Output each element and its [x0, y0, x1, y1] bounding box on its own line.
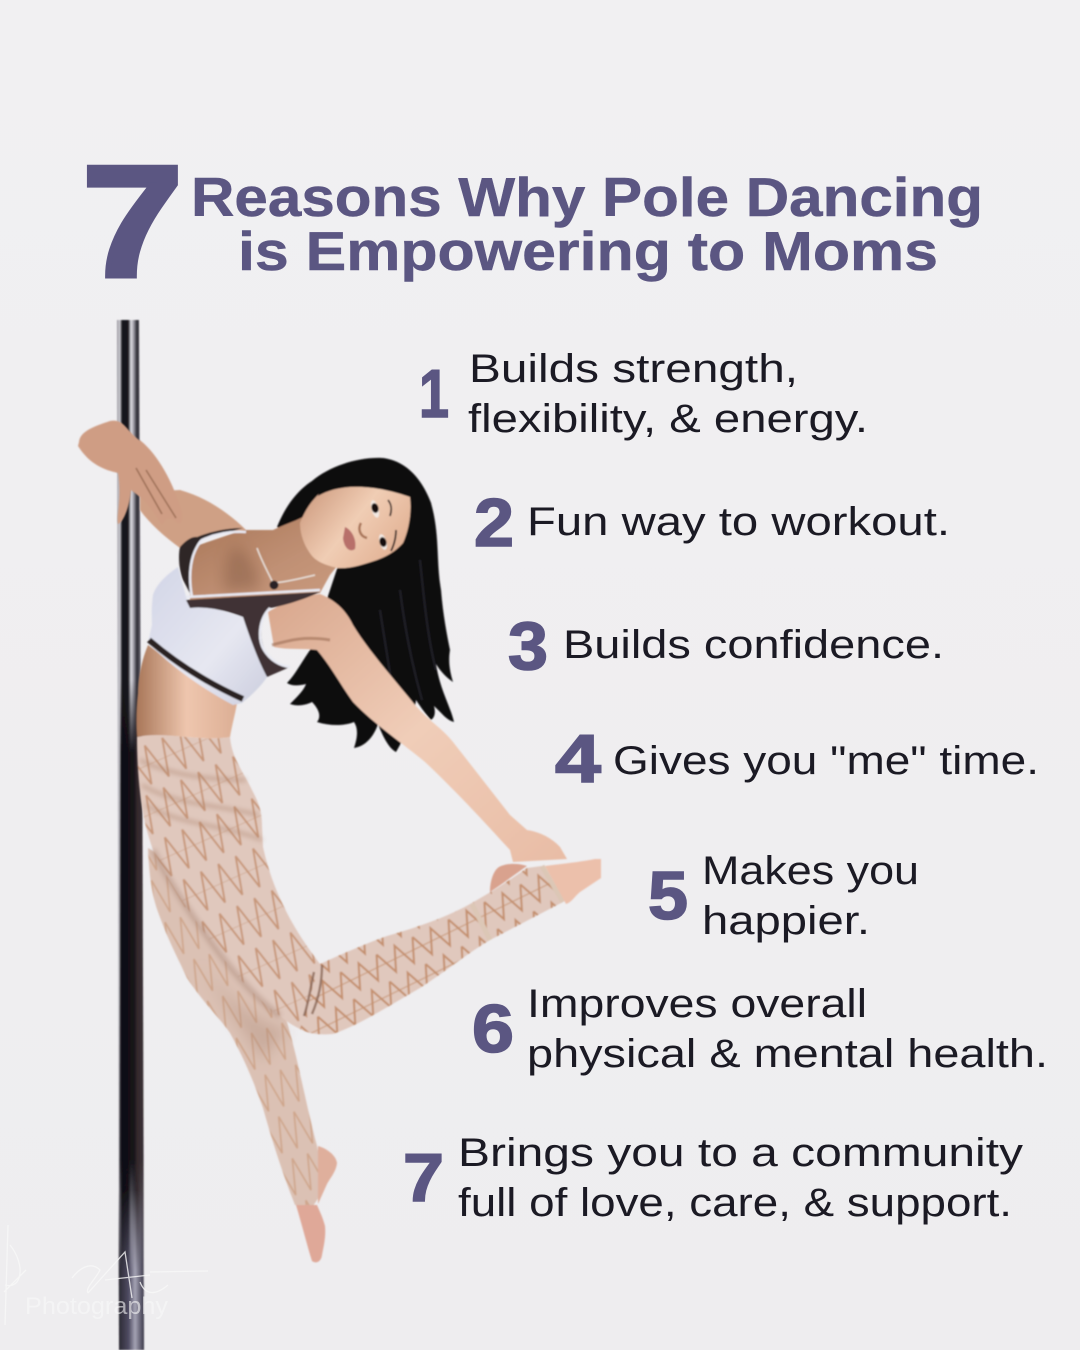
brows [388, 500, 396, 551]
reason 4: Gives you "me" time. [613, 739, 1039, 783]
reason 5: 5 [648, 858, 688, 934]
reason 1: flexibility, & energy. [468, 397, 868, 441]
pole [117, 320, 144, 1350]
reason 6: 6 [472, 991, 514, 1067]
hair over forehead [318, 458, 431, 552]
title line 2: is Empowering to Moms [238, 220, 938, 282]
raised foot [490, 859, 601, 904]
upper arm on pole [140, 490, 246, 548]
extended arm [268, 594, 567, 862]
reason 3: 3 [508, 608, 548, 684]
title [82, 134, 983, 310]
watermark [4, 1225, 208, 1325]
reason 1: Builds strength, [469, 347, 798, 391]
reason 1 [419, 347, 868, 441]
chest shadow [224, 545, 259, 592]
big seven: 7 [82, 134, 183, 310]
lower foot [296, 1146, 337, 1262]
sports bra [148, 528, 320, 705]
reason 7: full of love, care, & support. [458, 1181, 1012, 1225]
reason 4: 4 [555, 721, 601, 797]
reason 2: 2 [474, 485, 514, 561]
reason 5: happier. [702, 899, 870, 943]
nose [359, 523, 367, 538]
reason 2: Fun way to workout. [527, 500, 950, 544]
knee folds [304, 965, 322, 1016]
reason 5 [648, 849, 919, 943]
reason 3 [508, 608, 944, 684]
necklace [257, 548, 315, 590]
waist folds [140, 760, 262, 840]
neck and chest [190, 517, 338, 600]
ankle bands [472, 866, 563, 940]
armpit shadow [272, 638, 330, 645]
reason 4 [555, 721, 1039, 797]
reason 7 [403, 1131, 1023, 1225]
title line 1: Reasons Why Pole Dancing [191, 166, 983, 228]
back leg [148, 848, 323, 1206]
reason 1: 1 [419, 356, 449, 432]
reason 7: Brings you to a community [458, 1131, 1023, 1175]
front leg [137, 735, 563, 1034]
eyes [369, 499, 381, 519]
reason 5: Makes you [702, 849, 919, 893]
reason 2 [474, 485, 950, 561]
reason 6: physical & mental health. [527, 1032, 1048, 1076]
reason 6: Improves overall [527, 982, 867, 1026]
dancer photo illustration [78, 421, 601, 1262]
reason 7: 7 [403, 1140, 444, 1216]
lips [343, 527, 355, 550]
watermark text: Photography [25, 1293, 168, 1320]
hair back [277, 458, 454, 752]
face [300, 485, 411, 568]
abdomen [136, 645, 237, 738]
reason 3: Builds confidence. [563, 623, 944, 667]
reason 6 [472, 982, 1048, 1076]
hand on pole [78, 421, 183, 525]
